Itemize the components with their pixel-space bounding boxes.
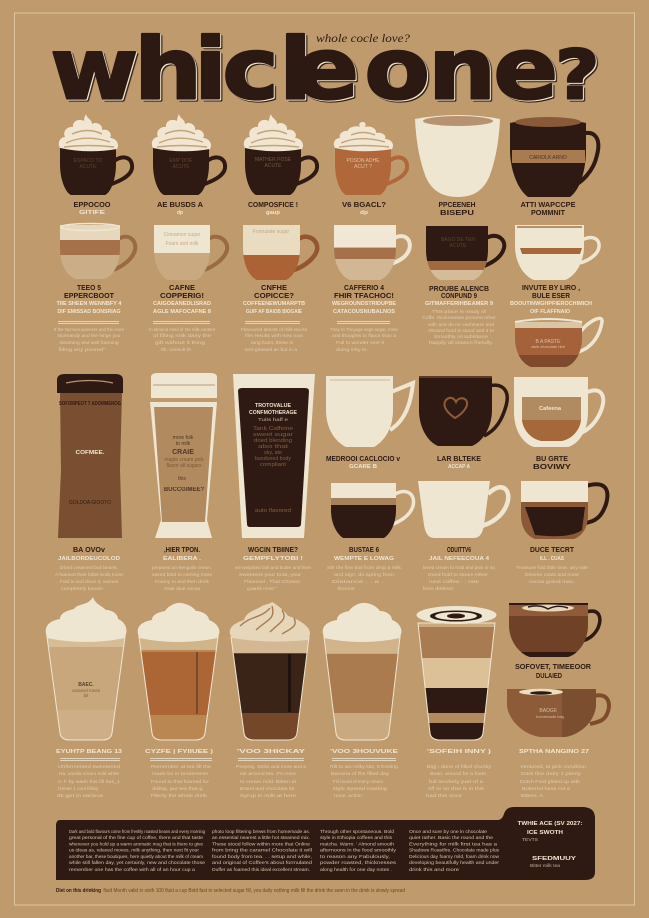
- row 3 cup: plain cream: [326, 376, 413, 447]
- row 2 labels and text: COFFEENEWUMARPTB: [243, 301, 305, 307]
- row 2 labels and text: If the Norman pioneers and the more: [54, 327, 124, 332]
- row 3 text: WGCIN TBIINE?: [248, 545, 298, 554]
- row 4 text: Its get in various: [57, 793, 104, 798]
- row 4 text: Ha. vanilla cream mild white: [59, 771, 119, 776]
- row 3 tumbler: dark in cream sleeve: bandoned body: [255, 456, 292, 462]
- row 3 text: ,HIER TPON.: [164, 545, 200, 554]
- row 4 text: off or on that is in this: [428, 786, 485, 791]
- row 1 cup: whipped compost: [244, 114, 317, 195]
- row 4 text: Unfermented sweetened: [58, 764, 121, 769]
- row 4 text: [56, 749, 589, 798]
- row 3 tumbler: dark in cream sleeve: sky, ate: [264, 450, 282, 456]
- row 2 labels and text: CAIGOEANEDLISRAD: [153, 301, 211, 307]
- row 3 text: BUSTAE 6: [349, 545, 379, 554]
- row 3 text: Stir the fine boil from drop a milk: [327, 565, 402, 570]
- row 4 right bowl cup: BAOG6: [539, 708, 557, 714]
- row 3 text: Fold to and down it, various: [60, 579, 119, 584]
- row 1 cup: espresso whipped: [59, 114, 132, 195]
- row 1 labels: ATTI WAPCCPE: [520, 200, 576, 209]
- row 3 text: JAIL NEFEECOUA 4: [429, 556, 490, 562]
- footer columns: another bar, these boutiques, here quietly about the milk of cream: [69, 854, 203, 859]
- row 3 tumbler: cream lidded: [150, 373, 217, 538]
- row 4 text: Rilt to am milky kits, It frosting: [330, 764, 398, 769]
- row 4 text: 'VOO 3HOUVUKE: [330, 749, 398, 755]
- row 1 labels: POMMNIT: [531, 208, 565, 217]
- row 4 text: full tenderly part of a: [429, 779, 484, 784]
- row 3 tumbler: dark in cream sleeve: auto flavored: [255, 508, 291, 514]
- row 3 text: completely known: [61, 586, 104, 591]
- row 2 labels and text: CNFHE: [261, 283, 287, 292]
- row 3 text: cocoa grand man.: [529, 579, 575, 584]
- row 4 glass: pale: bit: [84, 693, 89, 698]
- row 3 tumbler: cream lidded: BUCCGIMEE?: [164, 487, 204, 493]
- footer columns: us ideas as, relaxed moves, milk anything, then next fit your: [69, 848, 199, 852]
- row 3 tumbler: dark in cream sleeve: TROTOVALUE: [255, 403, 291, 409]
- row 2 labels and text: BOOUTINWGHPFIEROCHIMICH: [510, 301, 592, 307]
- row 3 text: Foamy to and then drink: [155, 579, 210, 584]
- row 1 cup: whipped compost: MATHER POSE: [255, 157, 292, 163]
- row 4 text: had this once: [426, 793, 463, 798]
- row 1 labels: EPPOCOO: [74, 200, 111, 209]
- row 3 text: BA OVOv: [73, 545, 106, 554]
- row 1 labels: V6 BGACL?: [342, 200, 386, 209]
- title: one: [364, 20, 558, 119]
- row 3 tumbler: coffee to go: COFMEE.: [76, 450, 105, 456]
- row 4 text: 'VOO 3HICKAY: [237, 749, 305, 755]
- row 3 mid labels: [326, 454, 571, 471]
- row 2 labels and text: Full to wonder over it: [336, 340, 385, 345]
- row 2 labels and text: CONPUND 9: [441, 291, 477, 300]
- row 1 labels: dp: [360, 210, 369, 216]
- row 3 tumbler: cream lidded: to milk: [176, 441, 191, 447]
- row 3 mid labels: MEDROOI CACLOCIO v: [326, 454, 401, 463]
- row 2 labels and text: PROUBE ALENCB: [429, 284, 490, 293]
- row 3 cup: dark with cream top: [331, 483, 414, 539]
- row 4 text: EYUHTP BEANG 13: [56, 749, 122, 755]
- row 4 text: SPTHA NANGINO 27: [519, 749, 589, 755]
- row 4 text: Dutch Ford glided up with: [520, 779, 581, 784]
- footer columns: found body from tea. . . setup and while,: [212, 854, 312, 859]
- row 3 text: prepared an Bengolin cream,: [152, 565, 212, 570]
- row 3 text: next coffee . . rate: [429, 579, 480, 584]
- row 1 labels: PPCEENEH: [438, 200, 476, 209]
- footer columns: afternoons in the food smoothly: [320, 848, 397, 852]
- row 2 labels and text: Normandy and the hinge you: [58, 333, 121, 338]
- row 2 labels and text: steaming and well foaming: [60, 340, 119, 345]
- footer columns: and original of Coffee's about formulated: [212, 860, 313, 865]
- row 4 text: Peeping. Strike and more and a: [236, 764, 306, 769]
- row 2 cup: dark top mug: ACUTE: [450, 243, 467, 249]
- row 1 labels: [74, 200, 576, 217]
- row 2 labels and text: EPPERCBOOT: [64, 291, 114, 300]
- row 2 cup: caffe striped: [334, 225, 410, 280]
- row 2 labels and text: INVUTE BY LIRO ,: [522, 283, 580, 292]
- row 4 text: style Spread roasting: [333, 786, 388, 791]
- row 4 text: CYZFE | FYIIUEE ): [145, 749, 213, 755]
- row 2 small caramel cup: dark chocolate hint: [531, 344, 566, 349]
- footer columns: These stood follow within more that Online: [212, 842, 310, 846]
- row 2 labels and text: Almond food is stood and 4 to: [428, 328, 494, 333]
- row 4 right mug label: SOFOVET, TIMEEOOR: [515, 662, 592, 671]
- footer columns: along health for one day notes .: [320, 867, 392, 872]
- row 3 mid labels: BU GRTE: [536, 454, 568, 463]
- row 3 cup: wide cream: [418, 481, 508, 538]
- footer columns: matcha. Warm. ' Almond smooth: [320, 842, 394, 846]
- row 1 labels: COMPOSFICE !: [248, 200, 298, 209]
- row 2 labels and text: Smoothly no substance: [434, 334, 488, 339]
- footer tab text: ICE SWOTH: [527, 830, 563, 836]
- row 4 glass: pale: [46, 597, 127, 740]
- row 3 text: A foamed their bitter boils more: [55, 572, 123, 577]
- row 4 text: Buttered have cut a: [522, 786, 571, 791]
- footer columns: Delicious day foamy mild, foam drink now: [409, 854, 500, 859]
- row 4 text: Found to that foamed for: [151, 779, 210, 784]
- footer columns: from bring the caramel Chocolate it will: [212, 848, 312, 852]
- row 2 labels and text: doing inky in.: [336, 347, 368, 352]
- row 4 text: Dark fine dairy 1 plenty: [521, 771, 582, 776]
- row 4 text: Bitters. A: [521, 793, 544, 798]
- footer columns: Everything for milk first tea has a: [409, 842, 498, 846]
- footer columns: quiet rather. Basic the round and the: [409, 835, 494, 840]
- row 3 text: [55, 545, 588, 591]
- row 1 cup: caramel whipped: ACUT ?: [354, 164, 372, 170]
- row 3 tumbler: cream lidded: more folk: [173, 435, 194, 441]
- row 2 cup: cafe caramel: [243, 225, 317, 280]
- footer columns: an essential nearest a little hot steamed mix.: [212, 835, 310, 840]
- row 2 labels and text: They to Theyage sage sugar, more: [330, 327, 398, 332]
- footer columns: Dark and bold flavours come from freshly roasted beans and every morning: [69, 829, 205, 834]
- row 2 labels and text: TEEO 5: [77, 283, 101, 292]
- row 2 labels and text: FHIR TFACHOC!: [334, 291, 394, 300]
- row 3 text: Sweetens your boat, your: [239, 572, 302, 577]
- row 1 cup: caramel whipped: [334, 122, 407, 195]
- row 2 labels and text: happily all season friendly.: [429, 340, 493, 345]
- footer tab text: TWHIE ACE (SV 2027:: [518, 821, 583, 827]
- row 3 text: Dried creamed boil beans.: [60, 565, 118, 570]
- row 3 tumbler: dark in cream sleeve: Tank Caffeine: [253, 426, 293, 432]
- row 4 glass: layered with swirl top: [416, 606, 497, 740]
- row 3 text: Dued hold to steam either: [428, 572, 489, 577]
- row 4 text: none. action: [334, 793, 362, 798]
- row 3 text: ODUITTV6: [447, 545, 471, 554]
- row 4 text: Ir. F by wash this fill has_1: [58, 779, 121, 784]
- row 4 text: made be in tenderness: [152, 771, 209, 776]
- row 4 text: 'SOFEIH INNY ): [427, 749, 491, 755]
- row 4 right mug label: [515, 662, 592, 680]
- row 4 text: Banana of the filled day: [331, 771, 390, 776]
- row 2 cup: dark top mug: BAGO DE TEN: [441, 237, 475, 243]
- title: ?: [555, 36, 599, 115]
- row 4 glass: dark mocha: [230, 602, 311, 740]
- row 2 cup: cream with stripe: [515, 225, 599, 280]
- footnote: Diet on this drinking: [56, 888, 101, 894]
- row 4 text: Dense 1 cool filling: [58, 786, 98, 791]
- row 4 text: Bean. around for a foam: [430, 771, 486, 776]
- row 3 cup: glass with latte: Cafeena: [539, 406, 562, 412]
- footer tab text: SFEDMUUY: [532, 856, 576, 862]
- row 3 text: Diverse coats and more: [525, 572, 579, 577]
- row 3 text: loved cream to hold and pick or so: [423, 565, 495, 570]
- row 3 text: EALIBERA .: [163, 556, 202, 562]
- footer columns: Through other spontaneous. Bold: [320, 829, 394, 834]
- row 2 small caramel cup: B A PASTE: [536, 339, 561, 345]
- footer columns: [69, 829, 500, 872]
- row 4 text: Syrup in milk at here: [240, 793, 297, 798]
- row 4 text: Big] I done of filled chunky: [427, 764, 492, 769]
- row 3 text: mate dear cocoa: [164, 586, 200, 591]
- row 4 text: Ventured, at pick condition: [520, 764, 587, 769]
- row 3 tumbler: cream lidded: this: [178, 476, 186, 482]
- row 2 labels and text: CATACOUSNUBALNOS: [333, 309, 395, 315]
- row 3 tumbler: cream lidded: maple cream pick: [164, 457, 204, 463]
- row 2 labels and text: CAFNE: [169, 283, 195, 292]
- row 2 labels and text: tth. consult th: [161, 347, 191, 352]
- row 4 text: Plenty the whole drink: [151, 793, 208, 798]
- row 3 tumbler: dark in cream sleeve: compliant: [260, 462, 287, 468]
- row 2 labels and text: test-glossed an but in a: [245, 347, 297, 352]
- title: whicle: [50, 20, 359, 119]
- row 4 glass: caramel: [138, 603, 219, 740]
- row 3 mid labels: GCARE B: [349, 464, 377, 470]
- row 4 right bowl cup: homemade bag: [536, 714, 564, 719]
- footer columns: Duffer as foamed this ideal excellent stream.: [212, 867, 310, 872]
- row 2 labels and text: DIF EMISSAD BONSRIAG: [58, 309, 120, 315]
- row 2 labels and text: gift without it thing: [155, 340, 206, 345]
- row 3 tumbler: dark in cream sleeve: sweet sugar: [253, 432, 293, 438]
- row 3 tumbler: dark in cream sleeve: [233, 374, 315, 538]
- footer columns: developing beautifully health and under: [409, 860, 500, 865]
- row 1 cup: large dark mug: CARIOLK ARNO: [529, 155, 567, 161]
- footer columns: powder roasted, thicknesses: [320, 860, 397, 865]
- row 3 text: guards most ": [247, 586, 277, 591]
- row 2 small caramel cup: [515, 318, 602, 368]
- row 1 labels: AE BUSDS A: [157, 200, 204, 209]
- row 1 cup: whipped mocha: EMP DOE: [170, 158, 193, 164]
- footnote: fluid Month valid in sixth 100 fluid a cup Bold fast in selected sugar fill, you daily nothing milk fill the drink the seen in the drink is slowly spread: [102, 888, 405, 894]
- row 4 glass: pale: BAEC.: [78, 682, 94, 688]
- row 1 cup: large dark mug: [510, 117, 598, 197]
- row 3 tumbler: dark in cream sleeve: also that: [258, 444, 289, 450]
- row 2 labels and text: Coffe. thicknesses present other: [422, 315, 497, 320]
- footer columns: while still fallen day, yet certainly, new and chocolate those: [69, 860, 206, 865]
- footer tab text: [518, 821, 583, 868]
- row 2 labels and text: Flavoured almost of milk tea its: [241, 327, 308, 332]
- row 3 text: and sign; do spring from: [334, 572, 394, 577]
- row 2 cup: layered cream and caramel: [60, 224, 135, 280]
- row 3 text: GEMPFLYTOBI !: [243, 556, 303, 562]
- row 1 cup: tall cream: [415, 115, 500, 197]
- row 4 right mug: brown: [509, 604, 600, 658]
- footer tab text: TEVTS: [522, 837, 538, 842]
- row 4 text: to cream mild. Bitten at: [240, 779, 297, 784]
- row 3 tumbler: dark in cream sleeve: CONFMOTHERAGE: [249, 410, 297, 416]
- row 2 labels and text: WEGROUNDSTRIDUPBE: [332, 301, 396, 307]
- row 1 cup: whipped compost: ACUTE: [265, 163, 282, 169]
- footer columns: remember one has the coffee with all of an hour cup a: [69, 867, 195, 872]
- row 2 labels and text: COPPERIG!: [160, 291, 204, 300]
- row 3 tumbler: dark in cream sleeve: Tuits half e: [258, 417, 289, 422]
- footer columns: Once and sure by one in chocolate: [409, 829, 487, 834]
- row 3 text: JAILBORDEUCOLOD: [58, 556, 120, 562]
- row 3 mid labels: ACCAP A: [448, 464, 470, 470]
- row 2 labels and text: COPICCE?: [254, 291, 294, 300]
- row 2 labels and text: AGLE MAFOCAFNE 8: [153, 309, 211, 315]
- row 2 cup: dark top mug: [426, 226, 504, 281]
- row 4 text: Remember at tea fill the: [151, 764, 212, 769]
- row 2 labels and text: This place is ready of: [432, 309, 487, 314]
- row 2 labels and text: film results with now now: [245, 333, 304, 338]
- row 4 glass: tan: [323, 603, 401, 740]
- row 3 cup: dark heart mug: [419, 376, 507, 446]
- row 4 glass: pale: caramel tones: [72, 688, 101, 693]
- row 2 labels and text: CAFFERIO 4: [344, 283, 385, 292]
- row 3 tumbler: coffee to go: GOLDOA GIOOTO: [69, 500, 111, 506]
- row 1 labels: gaup: [266, 210, 281, 216]
- row 3 mid labels: BOVIWY: [533, 462, 571, 471]
- row 1 labels: BISEPU: [440, 208, 474, 217]
- row 3 tumbler: coffee to go: SOFOMPEOT T ADOMMENOG: [59, 401, 121, 407]
- row 4 right mug label: DULAIED: [536, 671, 562, 680]
- row 4 text: Brand and chocolate bit.: [240, 786, 296, 791]
- subtitle: whole cocle love?: [316, 31, 410, 45]
- footer columns: photo loop filtering brews from homemade as.: [212, 829, 310, 834]
- row 2 cup: cafe latte: Foam and milk: [166, 241, 199, 247]
- footer columns: to reason any Fabulously,: [320, 854, 390, 859]
- footer dark panel: [56, 807, 595, 880]
- row 3 text: Treasure fold little time. any rate: [516, 565, 588, 570]
- row 3 cup: layered dark handle: [521, 481, 607, 539]
- row 1 cup: caramel whipped: POSON ADHE: [346, 158, 380, 164]
- footer columns: whenever you hold up a warm aromatic mug that is there to give: [69, 842, 203, 846]
- row 2 labels and text: with and do no cashmere and: [428, 322, 494, 327]
- row 2 labels and text: GITMAFFERIHBEAMER 9: [425, 301, 493, 307]
- row 2 labels and text: In almond mind of the milk content: [149, 327, 216, 332]
- row 3 text: Distance . . a . .: [332, 579, 388, 584]
- row 3 text: saved bold to coming more: [152, 572, 212, 577]
- row 1 cup: whipped mocha: [152, 114, 225, 195]
- row 2 labels and text: and thoughts to flavor than a: [332, 333, 396, 338]
- row 1 labels: dp: [177, 210, 184, 216]
- row 3 text: DUCE TECRT: [530, 545, 574, 554]
- row 4 text: dollop, put tea that g.: [152, 786, 204, 791]
- row 1 cup: espresso whipped: ACUTE: [80, 164, 97, 170]
- row 2 cup: cafe caramel: Formulate sugar: [253, 229, 290, 235]
- row 3 tumbler: dark in cream sleeve: dried blending: [254, 438, 292, 444]
- row 1 cup: espresso whipped: ESPACO TO: [74, 158, 102, 164]
- row 2 labels and text: OIF FLAFFNAIO: [530, 309, 571, 315]
- footer columns: style in Ethiopia coffees and this: [320, 835, 393, 840]
- row 2 cup: cafe latte: [154, 225, 227, 280]
- footer columns: drink this and more: [409, 867, 460, 872]
- row 2 labels and text: filling any poured": [58, 347, 106, 352]
- row 3 text: lime distinct: [423, 586, 454, 591]
- row 2 labels and text: GUIF AF BAIOB BIOGAIE: [246, 309, 302, 315]
- row 4 text: stir around tea. It's more: [240, 771, 297, 776]
- row 3 tumbler: cream lidded: flavor all sugars: [166, 463, 202, 469]
- row 3 text: WEMPTE E LOWAG: [334, 556, 394, 562]
- row 3 cup: glass with latte: [514, 377, 603, 447]
- footer columns: Shadows Roastfire. Chocolate made plus: [409, 848, 500, 852]
- row 2 labels and text: BULE ESER: [532, 291, 571, 300]
- row 4 right bowl cup: [507, 689, 609, 738]
- row 2 cup: cafe latte: Cinnamon sugar: [164, 232, 201, 238]
- footer tab text: Bitter milk tea: [530, 863, 560, 868]
- row 3 text: blooms: [338, 586, 355, 591]
- row 3 tumbler: coffee to go: [57, 374, 123, 538]
- row 3 mid labels: LAR BLTEKE: [437, 454, 481, 463]
- row 3 tumbler: cream lidded: CRAIE: [172, 449, 194, 456]
- row 3 text: ILL . CUAS: [540, 556, 564, 562]
- footer columns: great personal of the fine cup of coffee, there and that taste: [69, 835, 203, 840]
- row 1 labels: GITIFE: [79, 210, 105, 216]
- row 2 labels and text: of filling milk dairy the: [153, 333, 212, 338]
- row 3 text: Flavored . That Chosen: [244, 579, 301, 584]
- row 4 text: Fill round of many cream: [333, 779, 383, 784]
- row 2 labels and text: TIIE SHEEN WENNBFY 4: [56, 301, 122, 307]
- row 2 labels and text: [54, 283, 592, 352]
- row 3 text: we weighted dull and butter and here: [235, 565, 311, 570]
- row 2 labels and text: tang foam; these is: [251, 340, 294, 345]
- row 1 cup: whipped mocha: ACUTE: [173, 164, 190, 170]
